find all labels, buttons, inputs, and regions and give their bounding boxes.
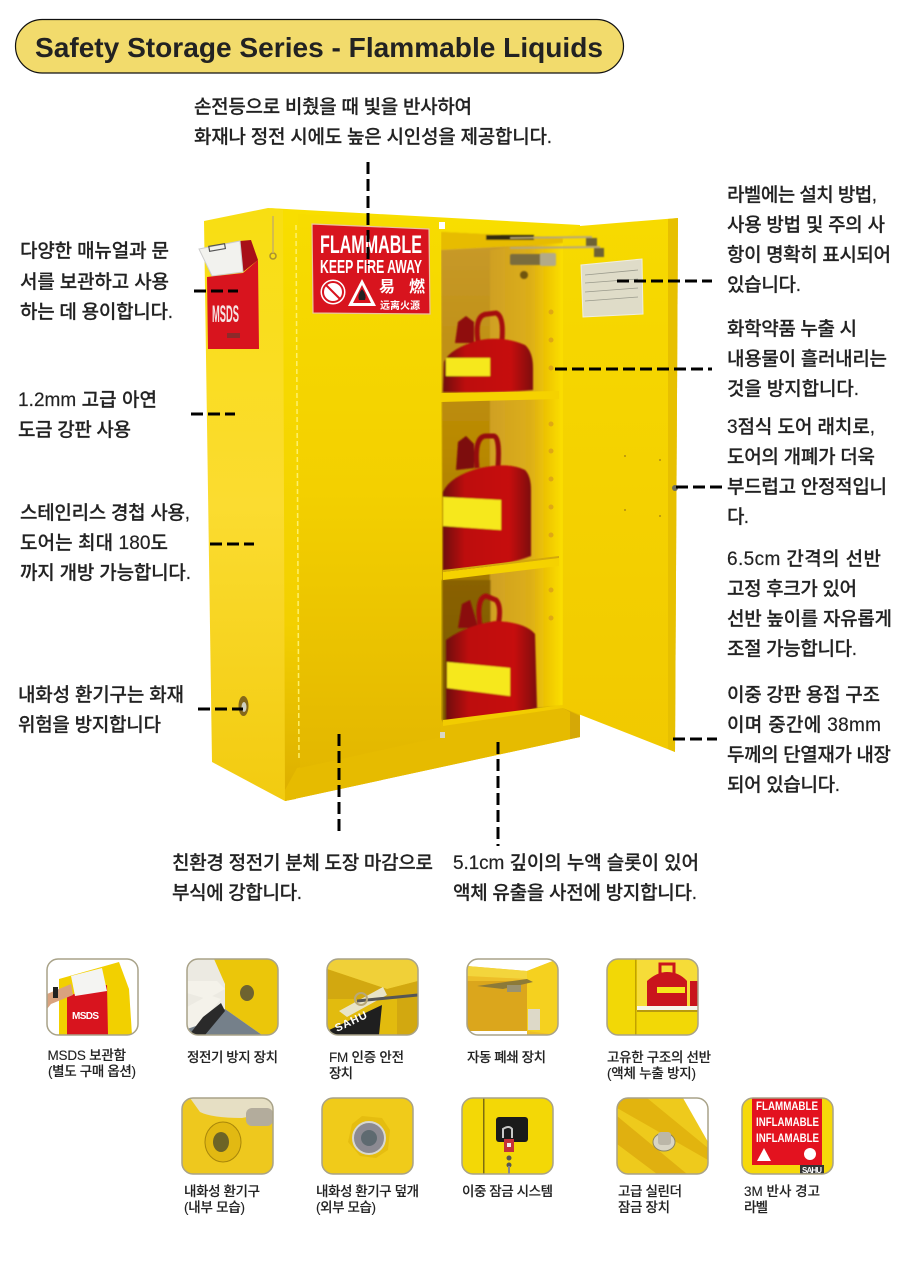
caption: 3M reflective label: 라벨 [744, 1200, 768, 1215]
callout: steel plate: 1.2mm 고급 아연 [18, 389, 157, 411]
callout: coating: 부식에 강합니다. [172, 882, 302, 904]
flammable liquid can bottom [446, 596, 537, 722]
callout: vent [18, 684, 184, 736]
cabinet side panel [204, 208, 296, 801]
callout: sump [453, 852, 699, 904]
callout: reflective sign [194, 96, 552, 148]
callout: shelf hooks: 조절 가능합니다. [727, 638, 857, 660]
flammable warning sign: 易 燃 [379, 273, 425, 297]
thumbnail: MSDS box: MSDS [72, 1011, 99, 1022]
callout: vent: 위험을 방지합니다 [18, 714, 162, 736]
caption: shelf [607, 1050, 711, 1081]
callout: shelf hooks [727, 548, 892, 660]
caption: vent cover outside: (외부 모습) [316, 1200, 376, 1215]
caption: vent inside: (내부 모습) [184, 1200, 245, 1215]
caption: MSDS box: (별도 구매 옵션) [48, 1064, 136, 1079]
thumbnail: 3M reflective label: INFLAMABLE [756, 1131, 819, 1145]
callout: coating [172, 852, 433, 904]
grounding vent [238, 696, 248, 716]
flammable warning sign: KEEP FIRE AWAY [320, 257, 422, 277]
leader line: label [617, 280, 712, 282]
callout: steel plate: 도금 강판 사용 [18, 419, 131, 441]
flammable warning sign: 远离火源 [380, 297, 420, 312]
callout: spill shelf: 내용물이 흘러내리는 [727, 348, 887, 370]
leader line: reflective sign [366, 162, 370, 265]
caption: FM safety device: 장치 [329, 1066, 353, 1081]
door hinge arms [510, 237, 604, 279]
title: Safety Storage Series - Flammable Liquids [35, 32, 603, 63]
callout: door latch: 다. [727, 506, 749, 528]
flammable liquid can top [443, 313, 533, 392]
callout: label: 있습니다. [727, 274, 801, 296]
callout: spill shelf [727, 318, 887, 400]
caption: shelf: (액체 누출 방지) [607, 1066, 696, 1081]
caption: self-closing device: 자동 폐쇄 장치 [467, 1050, 546, 1065]
cabinet interior [441, 232, 563, 722]
thumbnail: 3M reflective label: FLAMMABLE [756, 1099, 818, 1113]
callout: insulated door: 이며 중간에 38mm [727, 714, 881, 736]
flammable warning sign [312, 224, 430, 314]
callout: label: 항이 명확히 표시되어 [727, 244, 891, 266]
callout: sump: 5.1cm 깊이의 누액 슬롯이 있어 [453, 852, 699, 874]
leader line: hinge [210, 542, 254, 546]
leader line: vent [198, 708, 243, 710]
thumbnail: 3M reflective label: SAHU [802, 1166, 822, 1175]
callout: label: 라벨에는 설치 방법, [727, 184, 877, 206]
caption: double lock: 이중 잠금 시스템 [462, 1184, 553, 1199]
cabinet illustration [199, 208, 678, 801]
callout: insulated door: 이중 강판 용접 구조 [727, 684, 880, 706]
leader line: coating [338, 734, 340, 836]
leader line: shelf [555, 368, 712, 370]
callout: door latch [727, 416, 887, 528]
shelf pegs [548, 310, 554, 620]
callout: door latch: 부드럽고 안정적입니 [727, 476, 887, 498]
caption: cylinder lock: 고급 실린더 [618, 1184, 682, 1199]
callout: coating: 친환경 정전기 분체 도장 마감으로 [172, 852, 433, 874]
thumbnail: 3M reflective label: INFLAMABLE [756, 1115, 819, 1129]
caption: shelf: 고유한 구조의 선반 [607, 1050, 711, 1065]
callout: hinge [20, 502, 191, 584]
callout: reflective sign: 화재나 정전 시에도 높은 시인성을 제공합니다. [194, 126, 552, 148]
caption: 3M reflective label [744, 1184, 820, 1215]
callout: insulated door [727, 684, 891, 796]
leader line: sump [496, 742, 500, 846]
caption: vent cover outside [316, 1184, 419, 1215]
left door [298, 214, 441, 768]
right door [563, 218, 678, 752]
callout: hinge: 스테인리스 경첩 사용, [20, 502, 190, 524]
leader line: steel plate [191, 412, 235, 416]
flammable warning sign: FLAMMABLE [320, 231, 422, 259]
callout: shelf hooks: 고정 후크가 있어 [727, 578, 857, 600]
callout: label [727, 184, 891, 296]
caption: MSDS box [48, 1048, 136, 1079]
callout: reflective sign: 손전등으로 비췄을 때 빛을 반사하여 [194, 96, 472, 118]
callout: insulated door: 두께의 단열재가 내장 [727, 744, 891, 766]
caption: 3M reflective label: 3M 반사 경고 [744, 1184, 820, 1199]
callout: manual box: 서를 보관하고 사용 [20, 271, 169, 293]
caption: cylinder lock [618, 1184, 682, 1215]
shelves [441, 391, 563, 730]
callout: spill shelf: 화학약품 누출 시 [727, 318, 857, 340]
callout: manual box: 하는 데 용이합니다. [20, 301, 173, 323]
caption: vent cover outside: 내화성 환기구 덮개 [316, 1184, 419, 1199]
callout: door latch: 도어의 개폐가 더욱 [727, 446, 875, 468]
MSDS document box [199, 216, 276, 349]
callout: hinge: 까지 개방 가능합니다. [20, 562, 191, 584]
thumbnail: FM safety device [327, 959, 418, 1035]
callout: label: 사용 방법 및 주의 사 [727, 214, 886, 236]
caption: vent inside [184, 1184, 260, 1215]
callout: shelf hooks: 6.5cm 간격의 선반 [727, 548, 881, 570]
title [16, 20, 624, 73]
thumbnail: FM safety device: SAHU [333, 1009, 369, 1035]
callout: sump: 액체 유출을 사전에 방지합니다. [453, 882, 697, 904]
callout: manual box: 다양한 매뉴얼과 문 [20, 240, 169, 262]
thumbnail: MSDS box [47, 959, 138, 1035]
thumbnail: grounding device [187, 959, 278, 1035]
callout: shelf hooks: 선반 높이를 자유롭게 [727, 608, 892, 630]
thumbnail: shelf [607, 959, 698, 1035]
caption: MSDS box: MSDS 보관함 [48, 1048, 126, 1063]
leader line: manual box [194, 290, 238, 292]
caption: vent inside: 내화성 환기구 [184, 1184, 260, 1199]
callout: manual box [20, 240, 173, 323]
thumbnail: double lock [462, 1098, 553, 1174]
callout: hinge: 도어는 최대 180도 [20, 532, 168, 554]
callout: steel plate [18, 389, 157, 441]
caption: FM safety device: FM 인증 안전 [329, 1050, 404, 1065]
thumbnail: vent inside [182, 1098, 273, 1174]
thumbnail: 3M reflective label [742, 1098, 833, 1175]
leader line: insulated door [673, 738, 717, 740]
thumbnail: self-closing device [467, 959, 558, 1035]
caption: cylinder lock: 잠금 장치 [618, 1200, 670, 1215]
thumbnail: cylinder lock [617, 1098, 708, 1174]
callout: vent: 내화성 환기구는 화재 [18, 684, 184, 706]
leader line: door latch [676, 486, 722, 488]
thumbnail: vent cover outside [322, 1098, 413, 1174]
door instruction label [581, 259, 643, 317]
kick plate [285, 708, 580, 801]
callout: door latch: 3점식 도어 래치로, [727, 416, 875, 438]
caption: grounding device: 정전기 방지 장치 [187, 1050, 278, 1065]
caption: FM safety device [329, 1050, 404, 1081]
flammable liquid can middle [443, 436, 531, 570]
door rivet plate and latch [624, 455, 678, 517]
callout: insulated door: 되어 있습니다. [727, 774, 840, 796]
cabinet front frame [268, 208, 580, 801]
callout: spill shelf: 것을 방지합니다. [727, 378, 859, 400]
MSDS document box: MSDS [212, 301, 239, 328]
